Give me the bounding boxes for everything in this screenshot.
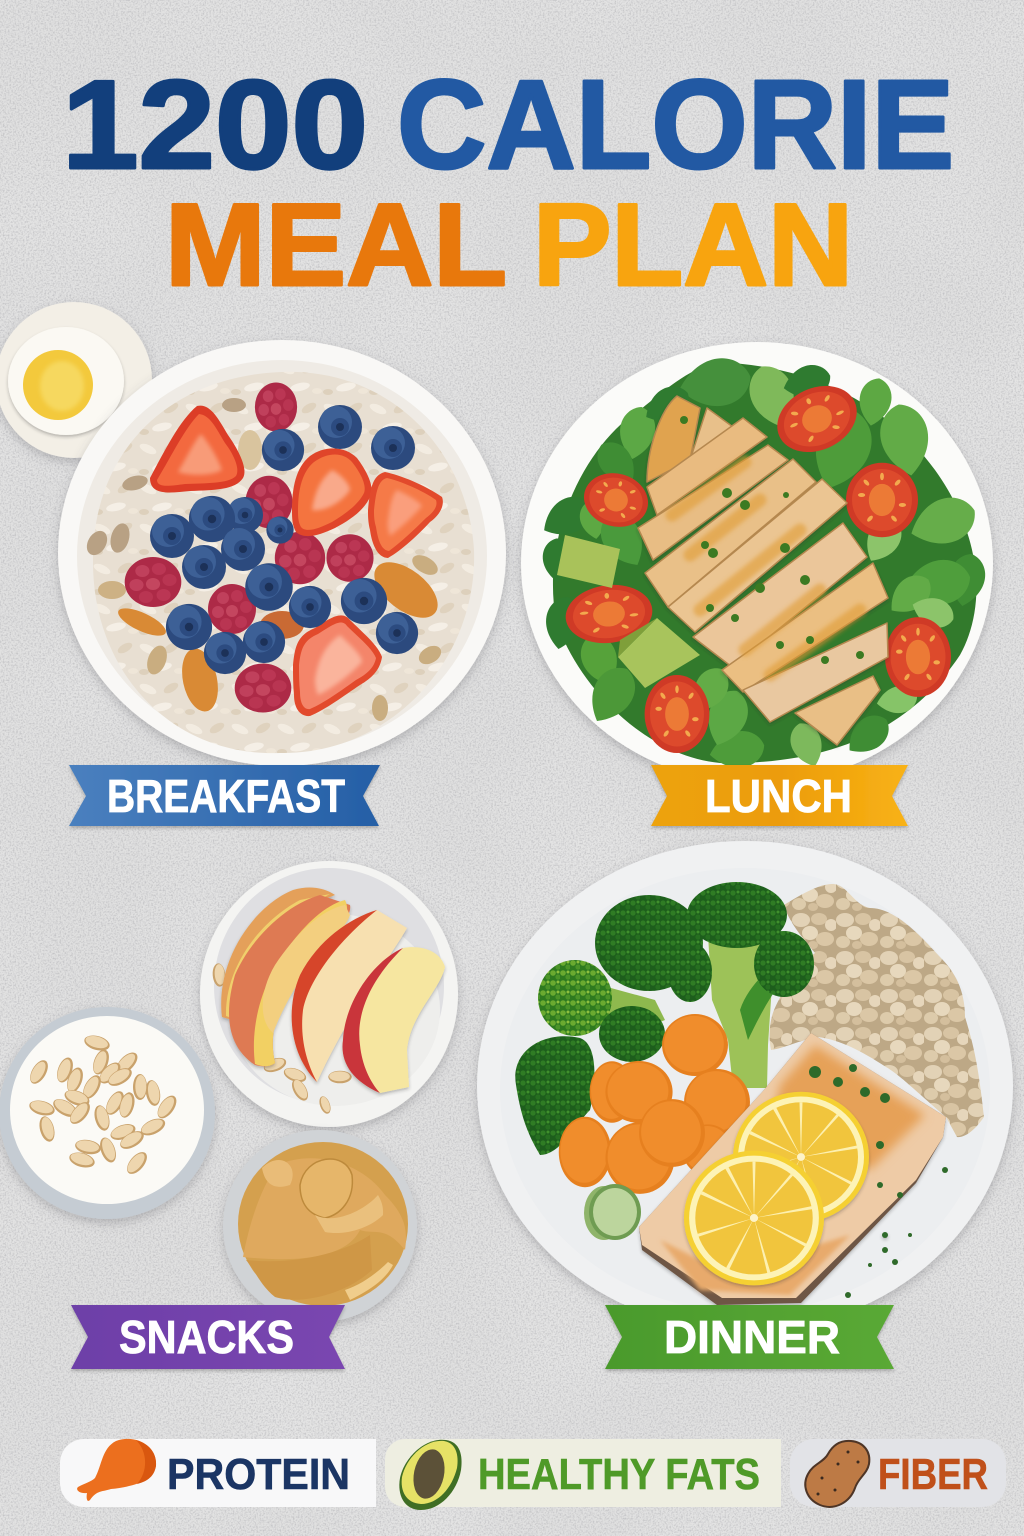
orange fruit pieces	[115, 551, 447, 715]
peanut butter	[238, 1142, 408, 1306]
title word: MEAL: MEAL	[165, 179, 507, 310]
fourth slice	[292, 910, 407, 1082]
title word: 1200: 1200	[62, 54, 368, 195]
carrots	[559, 1014, 750, 1194]
leaves	[535, 353, 989, 773]
bowl	[223, 1130, 417, 1322]
bowl	[58, 340, 506, 766]
yolk	[23, 350, 93, 420]
fifth slice	[342, 947, 445, 1093]
strawberry 2	[292, 448, 372, 536]
yogurt	[10, 1016, 204, 1204]
title	[62, 54, 954, 310]
ribbon: lunch	[651, 765, 908, 826]
blueberries	[150, 405, 418, 674]
legend strip	[60, 1439, 1006, 1510]
herb scatter	[845, 1167, 948, 1298]
icon: chicken drumstick	[77, 1439, 156, 1501]
golden glaze streaks	[672, 462, 860, 675]
title word: PLAN: PLAN	[533, 179, 853, 310]
strawberry 1	[150, 406, 245, 493]
parsley flecks	[680, 416, 864, 664]
almond flakes	[26, 1033, 180, 1177]
bowl	[0, 1007, 215, 1219]
bowl	[200, 861, 458, 1127]
yogurt bowl	[0, 1007, 215, 1219]
legend: protein	[60, 1439, 376, 1507]
legend: protein: PROTEIN	[167, 1450, 350, 1499]
second slice	[229, 895, 350, 1066]
avocado chunks	[557, 535, 700, 688]
bowl	[521, 342, 993, 784]
icon: avocado half	[399, 1440, 462, 1510]
ribbon: breakfast: BREAKFAST	[107, 770, 345, 822]
ribbon: snacks	[71, 1305, 345, 1369]
florets	[595, 895, 703, 991]
dish	[0, 302, 152, 458]
salad greens base	[553, 362, 976, 763]
peanut butter bowl	[223, 1130, 417, 1322]
bowl interior	[214, 868, 444, 1104]
sliced chicken breast	[638, 396, 888, 745]
icon: peanut	[805, 1441, 869, 1507]
legend: fiber	[790, 1439, 1006, 1507]
legend: healthy fats	[385, 1439, 781, 1510]
cucumber	[584, 1184, 641, 1240]
dinner plate	[477, 841, 1013, 1331]
plate	[477, 841, 1013, 1331]
sliced almonds in bowl	[212, 963, 352, 1115]
third slice	[263, 905, 350, 1033]
legend: healthy fats: HEALTHY FATS	[478, 1450, 760, 1499]
ribbon: dinner	[605, 1305, 894, 1369]
lunch salad bowl	[521, 342, 993, 784]
raspberries	[125, 382, 374, 712]
almond slices	[83, 398, 444, 721]
herb flecks	[809, 1064, 903, 1238]
breakfast oatmeal bowl	[58, 340, 506, 766]
boiled egg	[8, 327, 124, 435]
lemon slices	[684, 1092, 869, 1285]
ribbon: lunch: LUNCH	[705, 770, 852, 822]
broccoli stems	[590, 935, 800, 1088]
grain side	[770, 884, 984, 1137]
back slice	[221, 888, 335, 1020]
plate inner shading	[500, 868, 990, 1312]
oatmeal	[93, 372, 474, 753]
apple slices	[221, 888, 445, 1093]
title word: CALORIE: CALORIE	[397, 54, 954, 195]
legend: fiber: FIBER	[878, 1450, 988, 1499]
ribbon: snacks: SNACKS	[119, 1311, 294, 1363]
salmon fillet	[639, 1033, 946, 1305]
strawberry 3	[368, 472, 443, 558]
tomatoes	[562, 373, 951, 753]
swirls	[243, 1158, 406, 1300]
apple slices bowl	[200, 861, 458, 1127]
ribbon: dinner: DINNER	[664, 1311, 840, 1363]
strawberry 4	[293, 615, 382, 716]
egg dish	[0, 302, 152, 458]
broccoli	[515, 882, 814, 1155]
strawberries	[150, 406, 443, 716]
